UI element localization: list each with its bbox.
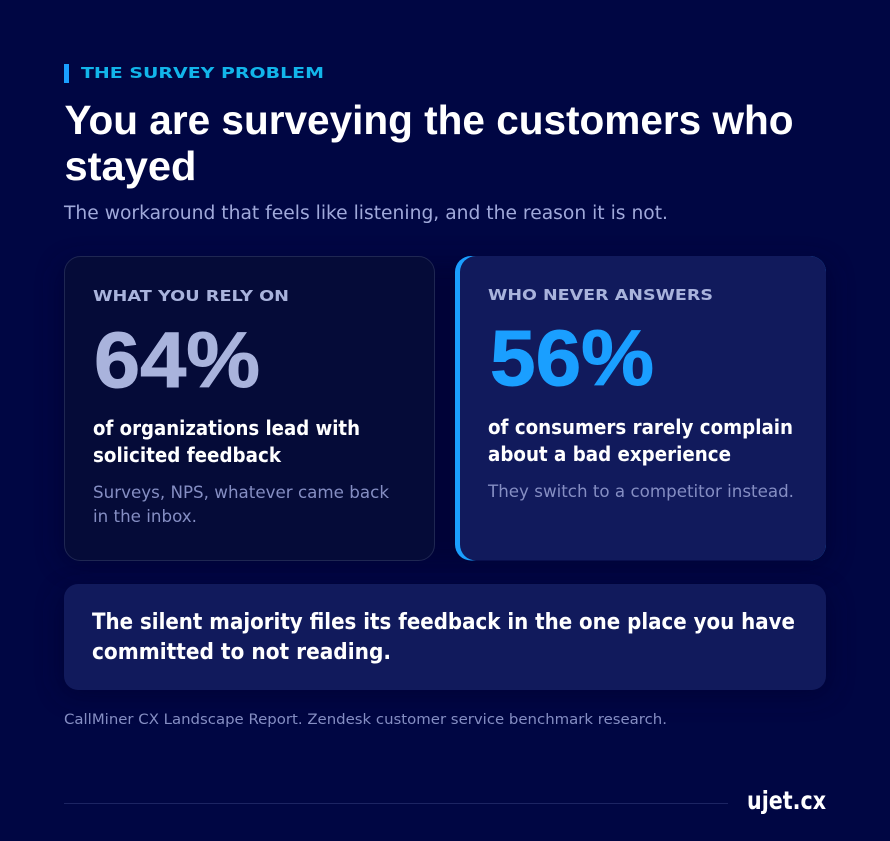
title: You are surveying the customers who (64, 97, 794, 143)
source note: CallMiner CX Landscape Report. Zendesk customer service benchmark research. (64, 712, 667, 728)
supporting note: They switch to a competitor instead. (487, 482, 794, 501)
panel: who never answers (455, 256, 826, 560)
callout band: The silent majority files its feedback in the one place you have (92, 610, 795, 635)
card label: WHO NEVER ANSWERS (488, 286, 713, 304)
stat: 56%: 56% (490, 313, 654, 402)
stat description (93, 416, 360, 467)
stat description: of consumers rarely complain (488, 415, 793, 439)
callout band (64, 584, 826, 690)
eyebrow: THE SURVEY PROBLEM (81, 64, 324, 82)
title: stayed (64, 143, 196, 189)
stat description: about a bad experience (488, 442, 731, 466)
stat description (488, 415, 793, 466)
logo: ujet.cx (747, 786, 826, 815)
stat description: of organizations lead with (93, 416, 360, 440)
stat description: solicited feedback (93, 443, 282, 467)
supporting note (93, 483, 389, 526)
title (64, 97, 794, 189)
supporting note: in the inbox. (93, 507, 197, 526)
card label: WHAT YOU RELY ON (93, 287, 289, 305)
supporting note: Surveys, NPS, whatever came back (93, 483, 389, 502)
panel: what you rely on (64, 256, 434, 560)
subtitle: The workaround that feels like listening, and the reason it is not. (63, 203, 668, 224)
callout band: committed to not reading. (92, 640, 391, 665)
stat: 64%: 64% (94, 315, 260, 404)
